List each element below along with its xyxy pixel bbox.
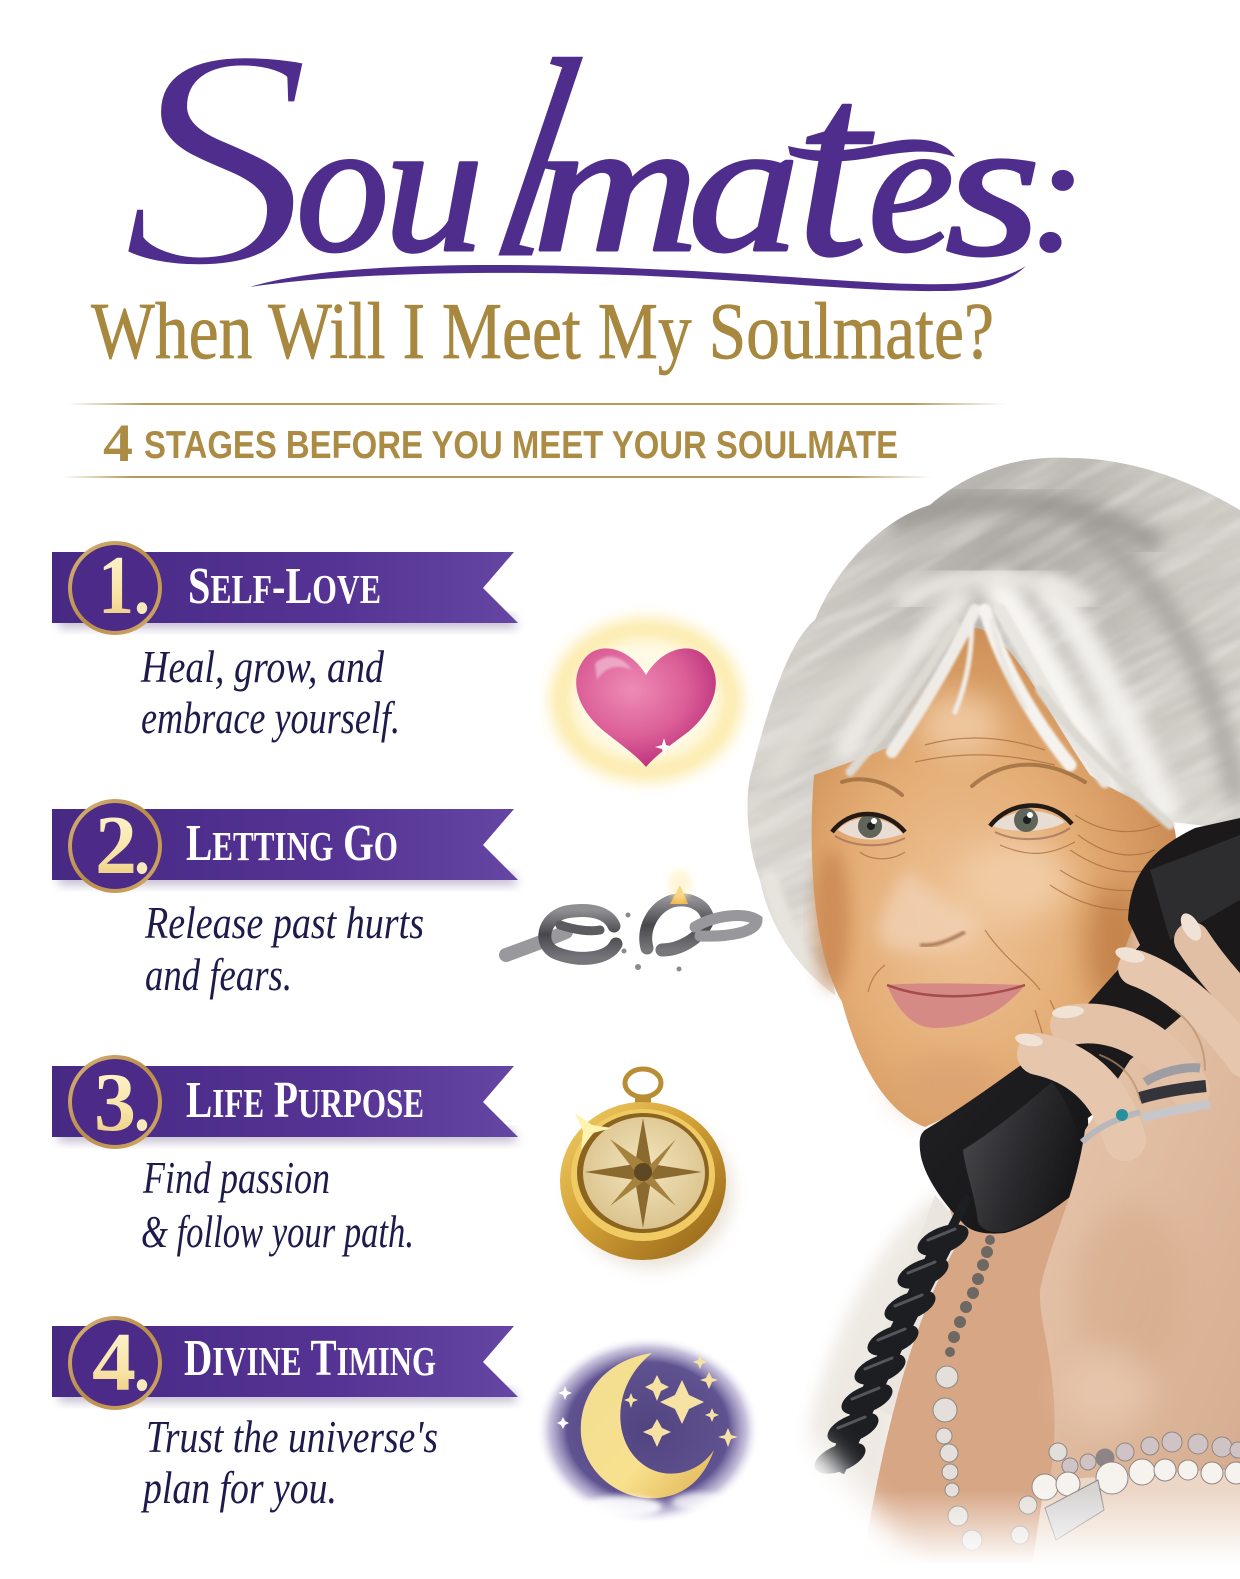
number badge: 4	[92, 1316, 136, 1409]
necklace	[933, 1235, 1037, 1550]
number badge	[68, 539, 162, 635]
ribbon heading: LIFE PURPOSE	[186, 1072, 424, 1129]
stage text: embrace yourself.	[141, 693, 400, 743]
ribbon heading: LETTING GO	[186, 815, 398, 872]
title: Soulmates: u	[384, 81, 484, 292]
number badge: .	[134, 1326, 150, 1406]
section heading: 4 stages: 4	[103, 413, 133, 473]
stage 2	[52, 799, 757, 1000]
nostril shade	[920, 932, 965, 945]
ribbon banner	[52, 809, 518, 880]
hand and fingers	[1014, 910, 1240, 1480]
icon: crescent moon and stars	[536, 1336, 760, 1524]
title: Soulmates: t	[795, 19, 878, 312]
title: Soulmates: l	[475, 1, 599, 317]
title: Soulmates: o	[296, 80, 389, 291]
telephone handset	[920, 818, 1240, 1234]
title: Soulmates: :	[1028, 99, 1087, 287]
section heading: 4 stages	[103, 413, 898, 473]
number badge: 3	[94, 1056, 136, 1149]
stage text	[140, 1412, 438, 1513]
title: Soulmates: m	[532, 81, 699, 291]
title: Soulmates	[120, 0, 1087, 333]
number badge: 2	[95, 799, 137, 892]
eyes	[832, 805, 1072, 845]
number badge: .	[134, 549, 150, 629]
eyebrows	[842, 765, 1085, 795]
rings	[1082, 1068, 1210, 1142]
number badge: 1	[98, 539, 134, 632]
forearm	[1030, 1460, 1240, 1579]
ribbon shadow	[56, 1129, 518, 1142]
coiled phone cord	[810, 1196, 973, 1480]
photo fade: bottom	[780, 1490, 1240, 1565]
facial shading and wrinkles	[814, 695, 1160, 1115]
stage text: Trust the universe's	[146, 1412, 438, 1462]
face	[812, 628, 1176, 1127]
stage text: plan for you.	[140, 1463, 337, 1513]
title underline swash	[250, 265, 1026, 291]
ribbon banner	[52, 552, 518, 623]
illustration: woman on phone	[433, 165, 1240, 1579]
photo fade: bottom left	[770, 1410, 925, 1579]
icon: broken chain	[506, 869, 757, 972]
sweater	[800, 1170, 1240, 1579]
hair mass with strands	[748, 458, 1240, 995]
title: Soulmates: s	[945, 76, 1041, 298]
ribbon banner	[52, 1326, 518, 1397]
stage 3	[52, 1055, 732, 1268]
title: Soulmates: a	[688, 81, 800, 291]
number badge	[68, 1055, 162, 1149]
ribbon banner	[52, 1066, 518, 1137]
number badge: .	[134, 1066, 150, 1146]
stage text: Find passion	[142, 1153, 330, 1203]
title: Soulmates: e	[868, 81, 954, 292]
ribbon shadow	[56, 615, 518, 628]
ribbon heading: DIVINE TIMING	[184, 1330, 436, 1387]
ribbon shadow	[56, 872, 518, 885]
number badge: .	[134, 809, 150, 889]
neck and chest	[860, 1170, 1090, 1579]
icon: glowing heart	[558, 628, 734, 772]
stage text	[141, 1153, 414, 1257]
subtitle: When Will I Meet My Soulmate?	[91, 288, 994, 376]
fringe over forehead	[850, 610, 1170, 825]
stage text: and fears.	[145, 950, 292, 1000]
ribbon heading: SELF-LOVE	[188, 558, 381, 615]
stage text	[140, 642, 400, 743]
stage text: Release past hurts	[144, 898, 424, 948]
lip line	[887, 985, 1025, 996]
number badge	[68, 799, 162, 893]
stage 1	[52, 539, 734, 772]
nose	[878, 870, 978, 952]
stage text	[144, 898, 424, 1000]
ribbon shadow	[56, 1389, 518, 1402]
stage text: & follow your path.	[141, 1207, 414, 1257]
bracelets	[1032, 1432, 1240, 1540]
icon: gold compass	[560, 1069, 732, 1268]
section heading: 4 stages: STAGES BEFORE YOU MEET YOUR SOULMATE	[144, 424, 898, 467]
lips	[887, 983, 1025, 1028]
stage 4	[52, 1316, 760, 1524]
stage text: Heal, grow, and	[140, 642, 384, 692]
number badge	[68, 1316, 162, 1410]
title crossbar flourish	[788, 139, 955, 162]
